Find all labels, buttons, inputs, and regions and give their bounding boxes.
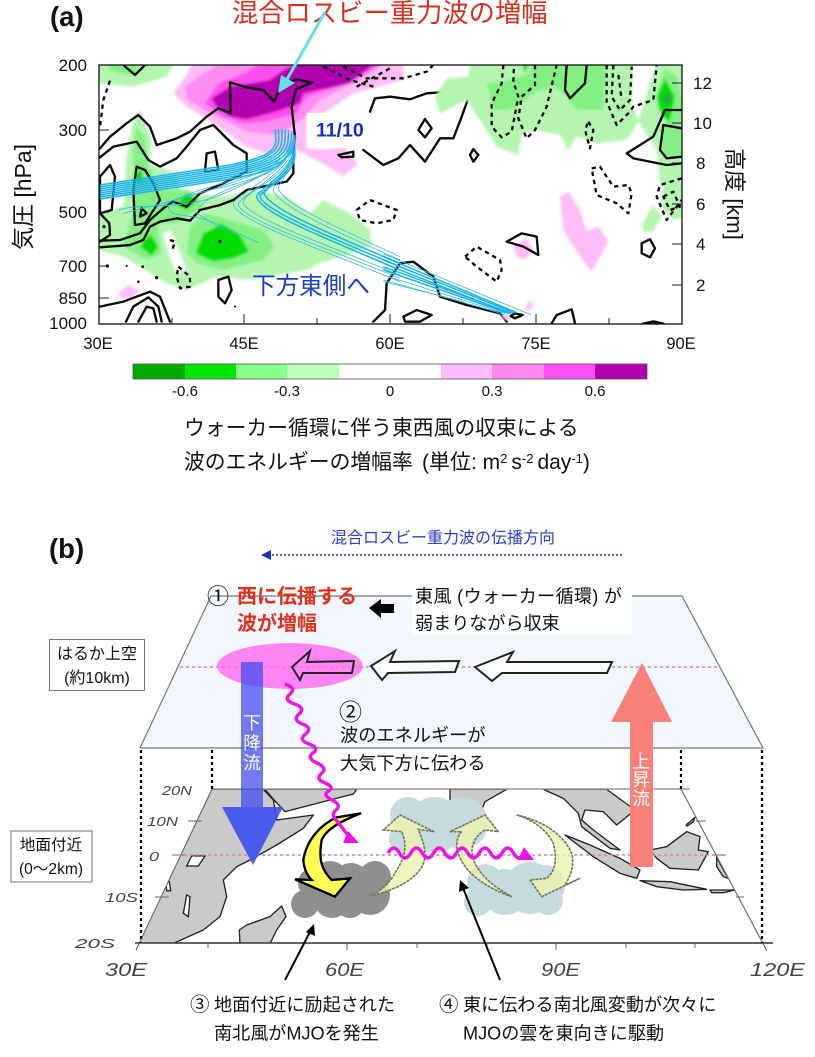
right axis labels bbox=[693, 74, 712, 295]
bottom axis labels: 90E bbox=[666, 335, 696, 353]
caption: step 3: 南北風がMJOを発生 bbox=[214, 1024, 379, 1044]
ascending flow arrow: 上 bbox=[632, 752, 650, 772]
heading: propagation direction: 混合ロスビー重力波の伝播方向 bbox=[331, 529, 555, 547]
label box: near surface: 地面付近 bbox=[20, 836, 83, 854]
descending flow arrow: 流 bbox=[243, 753, 261, 773]
land masses bbox=[137, 789, 735, 945]
bottom axis labels: 75E bbox=[521, 335, 551, 353]
left axis labels: 850 bbox=[59, 289, 87, 308]
colour bar legend: -0.6 bbox=[172, 383, 198, 400]
latitude labels: 20S bbox=[73, 936, 116, 951]
white box behind wind text bbox=[412, 582, 632, 635]
right axis labels: 4 bbox=[696, 235, 705, 254]
cloud: pale MJO cloud, north bbox=[389, 797, 488, 854]
label: 11/10: 11/10 bbox=[316, 120, 364, 142]
ascending flow arrow: 流 bbox=[632, 789, 650, 809]
equator dashed line bbox=[172, 854, 725, 856]
latitude labels bbox=[73, 783, 193, 951]
left axis labels: 700 bbox=[59, 257, 87, 276]
upper level dashed line bbox=[180, 666, 717, 668]
arrow: pointing to pale cloud bbox=[459, 880, 500, 980]
caption for panel (a) bbox=[184, 417, 590, 474]
wave-ray streamlines bbox=[100, 129, 400, 282]
colour bar legend bbox=[133, 364, 647, 400]
wavy arrow: eastward propagation bbox=[388, 847, 534, 860]
caption for panel (a): 2 bbox=[500, 451, 507, 466]
latitude labels: 0 bbox=[149, 849, 160, 864]
left axis labels: 1000 bbox=[49, 314, 87, 333]
longitude labels: 90E bbox=[541, 960, 581, 980]
yellow dotted arrow 1 bbox=[370, 815, 434, 896]
longitude labels: 30E bbox=[105, 960, 148, 980]
caption for panel (a): ) bbox=[583, 451, 590, 474]
arrow: westward propagation bbox=[261, 550, 622, 560]
right axis labels: 2 bbox=[696, 276, 705, 295]
caption: step 3: ③ bbox=[190, 994, 210, 1016]
bottom axis labels bbox=[83, 335, 696, 353]
caption: step 3 bbox=[190, 994, 395, 1044]
cloud: pale MJO cloud, south bbox=[464, 862, 565, 916]
hollow wind arrow 1 bbox=[292, 651, 354, 680]
bottom axis labels: 30E bbox=[83, 335, 113, 353]
text: easterly winds converge: 弱まりながら収束 bbox=[415, 614, 560, 634]
upper level plane bbox=[140, 596, 763, 748]
descending flow arrow: 下 bbox=[243, 713, 261, 733]
text: step 1: 西に伝播する bbox=[237, 585, 357, 608]
latitude labels: 10N bbox=[147, 814, 179, 829]
latitude labels: 20N bbox=[161, 783, 193, 798]
yellow dotted arrow 2 bbox=[450, 815, 512, 897]
plot frame bbox=[99, 65, 682, 324]
right axis labels: 8 bbox=[696, 154, 705, 173]
yellow dotted arrow 3 bbox=[517, 815, 580, 897]
latitude labels: 10S bbox=[105, 890, 138, 905]
text: easterly winds converge: 東風 (ウォーカー循環) が bbox=[415, 586, 622, 606]
caption: step 3: 地面付近に励起された bbox=[214, 995, 395, 1015]
map frame bbox=[135, 789, 773, 951]
colour bar legend: -0.3 bbox=[274, 383, 300, 400]
hollow wind arrow 3 bbox=[475, 652, 612, 681]
text: step 2: 波のエネルギーが bbox=[340, 726, 486, 746]
text: step 1: ① bbox=[207, 584, 229, 609]
colour bar legend: 0 bbox=[386, 383, 394, 400]
panel label (b): (b) bbox=[49, 533, 84, 564]
big yellow curved arrow bbox=[295, 813, 361, 897]
longitude labels: 120E bbox=[750, 960, 806, 980]
ascending flow arrow: 昇 bbox=[632, 770, 650, 790]
right axis labels: 6 bbox=[696, 195, 705, 214]
axis ticks bbox=[99, 83, 682, 324]
text: step 1 bbox=[207, 584, 357, 635]
arrow: pointing to dark cloud bbox=[285, 924, 315, 980]
y axis title: pressure: 気圧 [hPa] bbox=[10, 144, 36, 250]
map panel: Indian Ocean bbox=[73, 750, 806, 980]
right axis labels: 10 bbox=[693, 114, 712, 133]
colour bar legend: 0.3 bbox=[482, 383, 502, 400]
caption for panel (a): -1 bbox=[571, 451, 583, 466]
descending flow arrow: 降 bbox=[243, 733, 261, 753]
caption: step 4: ④ bbox=[439, 994, 459, 1016]
left axis labels: 500 bbox=[59, 203, 87, 222]
text: step 1: 波が増幅 bbox=[237, 611, 317, 635]
left axis labels bbox=[49, 56, 87, 333]
arrow: cyan pointer bbox=[278, 12, 325, 93]
wavy arrow: energy propagating downward bbox=[285, 684, 359, 843]
label box: near surface: (0〜2km) bbox=[19, 861, 83, 878]
colour bar legend: 0.6 bbox=[585, 383, 605, 400]
label box: date 11/10 bbox=[307, 113, 346, 148]
caption for panel (a): s bbox=[511, 451, 522, 474]
y axis title: height: 高度 [km] bbox=[722, 148, 747, 240]
right axis labels: 12 bbox=[693, 74, 712, 93]
caption: step 4 bbox=[439, 994, 716, 1044]
caption: step 4: 東に伝わる南北風変動が次々に bbox=[463, 995, 716, 1015]
descending flow arrow bbox=[222, 662, 283, 865]
caption for panel (a): -2 bbox=[522, 451, 533, 466]
cloud: dark MJO cloud bbox=[291, 861, 391, 918]
wave amplification ellipse bbox=[217, 643, 363, 689]
label box: near surface bbox=[11, 831, 92, 882]
panel label (a): (a) bbox=[50, 1, 84, 32]
bottom axis labels: 60E bbox=[375, 335, 405, 353]
shaded field and contours bbox=[97, 62, 685, 324]
left axis labels: 200 bbox=[59, 56, 87, 75]
longitude labels: 60E bbox=[325, 960, 365, 980]
text: step 2 bbox=[339, 699, 486, 774]
label box: high altitude bbox=[50, 640, 144, 690]
caption for panel (a): day bbox=[537, 451, 572, 474]
label box: high altitude: (約10km) bbox=[64, 669, 130, 687]
caption for panel (a): ウォーカー循環に伴う東西風の収束による bbox=[184, 417, 579, 440]
longitude labels bbox=[105, 960, 806, 980]
ascending flow arrow bbox=[611, 663, 672, 867]
text: step 2: ② bbox=[339, 699, 362, 725]
label: downward and eastward: 下方東側へ bbox=[252, 273, 370, 300]
caption: step 4: MJOの雲を東向きに駆動 bbox=[463, 1024, 664, 1044]
caption for panel (a): (単位: m bbox=[422, 451, 500, 474]
arrow: black westward bbox=[369, 599, 394, 618]
label box: high altitude: はるか上空 bbox=[57, 645, 137, 663]
dotted vertical guide lines bbox=[141, 750, 762, 943]
text: easterly winds converge bbox=[415, 586, 622, 634]
hollow wind arrow 2 bbox=[371, 651, 459, 680]
text: step 2: 大気下方に伝わる bbox=[340, 754, 486, 774]
bottom axis labels: 45E bbox=[229, 335, 259, 353]
left axis labels: 300 bbox=[59, 121, 87, 140]
caption for panel (a): 波のエネルギーの増幅率 bbox=[184, 451, 413, 474]
